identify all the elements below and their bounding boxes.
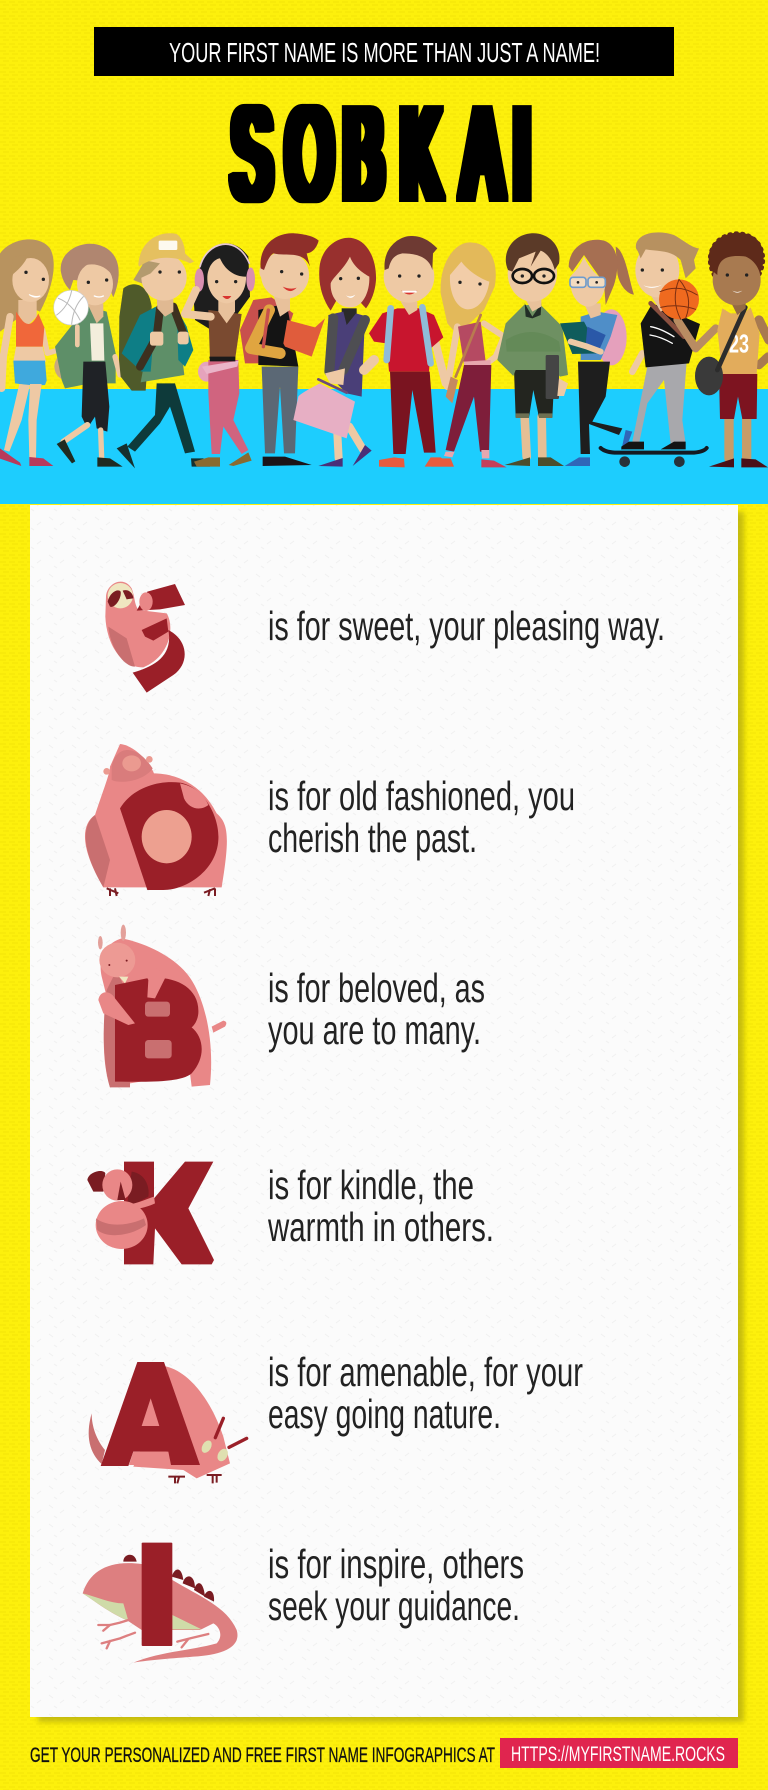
text B: is for beloved, as [268, 965, 485, 1011]
row B: beloved [98, 925, 485, 1087]
row O: old fashioned: cherish the past. [268, 815, 477, 861]
icon: sloth on letter S [105, 582, 185, 693]
person 1: girl in orange top [0, 239, 75, 466]
row O: old fashioned [85, 744, 575, 896]
person 9: boy with glasses [497, 233, 568, 466]
person 10: girl with ponytail and tablet [560, 240, 634, 466]
icon: anteater on letter B [98, 925, 226, 1087]
person 7: boy in red tee [364, 236, 453, 467]
person 8: blonde girl [431, 242, 507, 467]
row I: inspire [83, 1541, 524, 1663]
sleeve of person seven [372, 323, 384, 342]
white content panel [30, 505, 738, 1717]
text A: is for amenable, for your [268, 1349, 583, 1395]
row K: kindle [87, 1162, 494, 1264]
row K: kindle: warmth in others. [267, 1204, 494, 1250]
person 3: hiker with cap and backpack [117, 233, 210, 468]
row A: amenable [89, 1349, 583, 1483]
icon: lizard on letter I [83, 1543, 237, 1663]
icon: armadillo on letter A [89, 1362, 247, 1483]
icon: koala on letter K [87, 1162, 214, 1264]
row S: sweet [105, 582, 665, 693]
row B: beloved: you are to many. [268, 1007, 481, 1053]
person 4: girl with headphones [185, 243, 255, 467]
footer call to action: GET YOUR PERSONALIZED AND FREE FIRST NAME INFOGRAPHICS AT [30, 1744, 495, 1767]
illustration: group of twelve students [0, 232, 768, 468]
footer url badge [500, 1738, 738, 1768]
students right half [364, 232, 768, 467]
person 11: skater with basketball [601, 232, 716, 467]
text I: is for inspire, others [268, 1541, 524, 1587]
blue floor band [0, 389, 768, 504]
person 12: boy in tank top with bag [695, 233, 768, 467]
icon: gorilla on letter O [85, 744, 227, 896]
students left half [0, 233, 384, 468]
person 6: girl with pink handbag [293, 238, 376, 467]
header banner [94, 27, 674, 76]
name title: SOBKAI [232, 80, 530, 227]
panel shadow [38, 512, 744, 1722]
person 5: boy with book [240, 233, 325, 466]
row I: inspire: seek your guidance. [268, 1583, 520, 1629]
person 12: boy in tank top with bag: 23 [729, 329, 749, 359]
text O: is for old fashioned, you [268, 773, 575, 819]
row A: amenable: easy going nature. [268, 1391, 501, 1437]
text K: is for kindle, the [268, 1162, 474, 1208]
person 2: girl with volleyball [54, 244, 123, 467]
